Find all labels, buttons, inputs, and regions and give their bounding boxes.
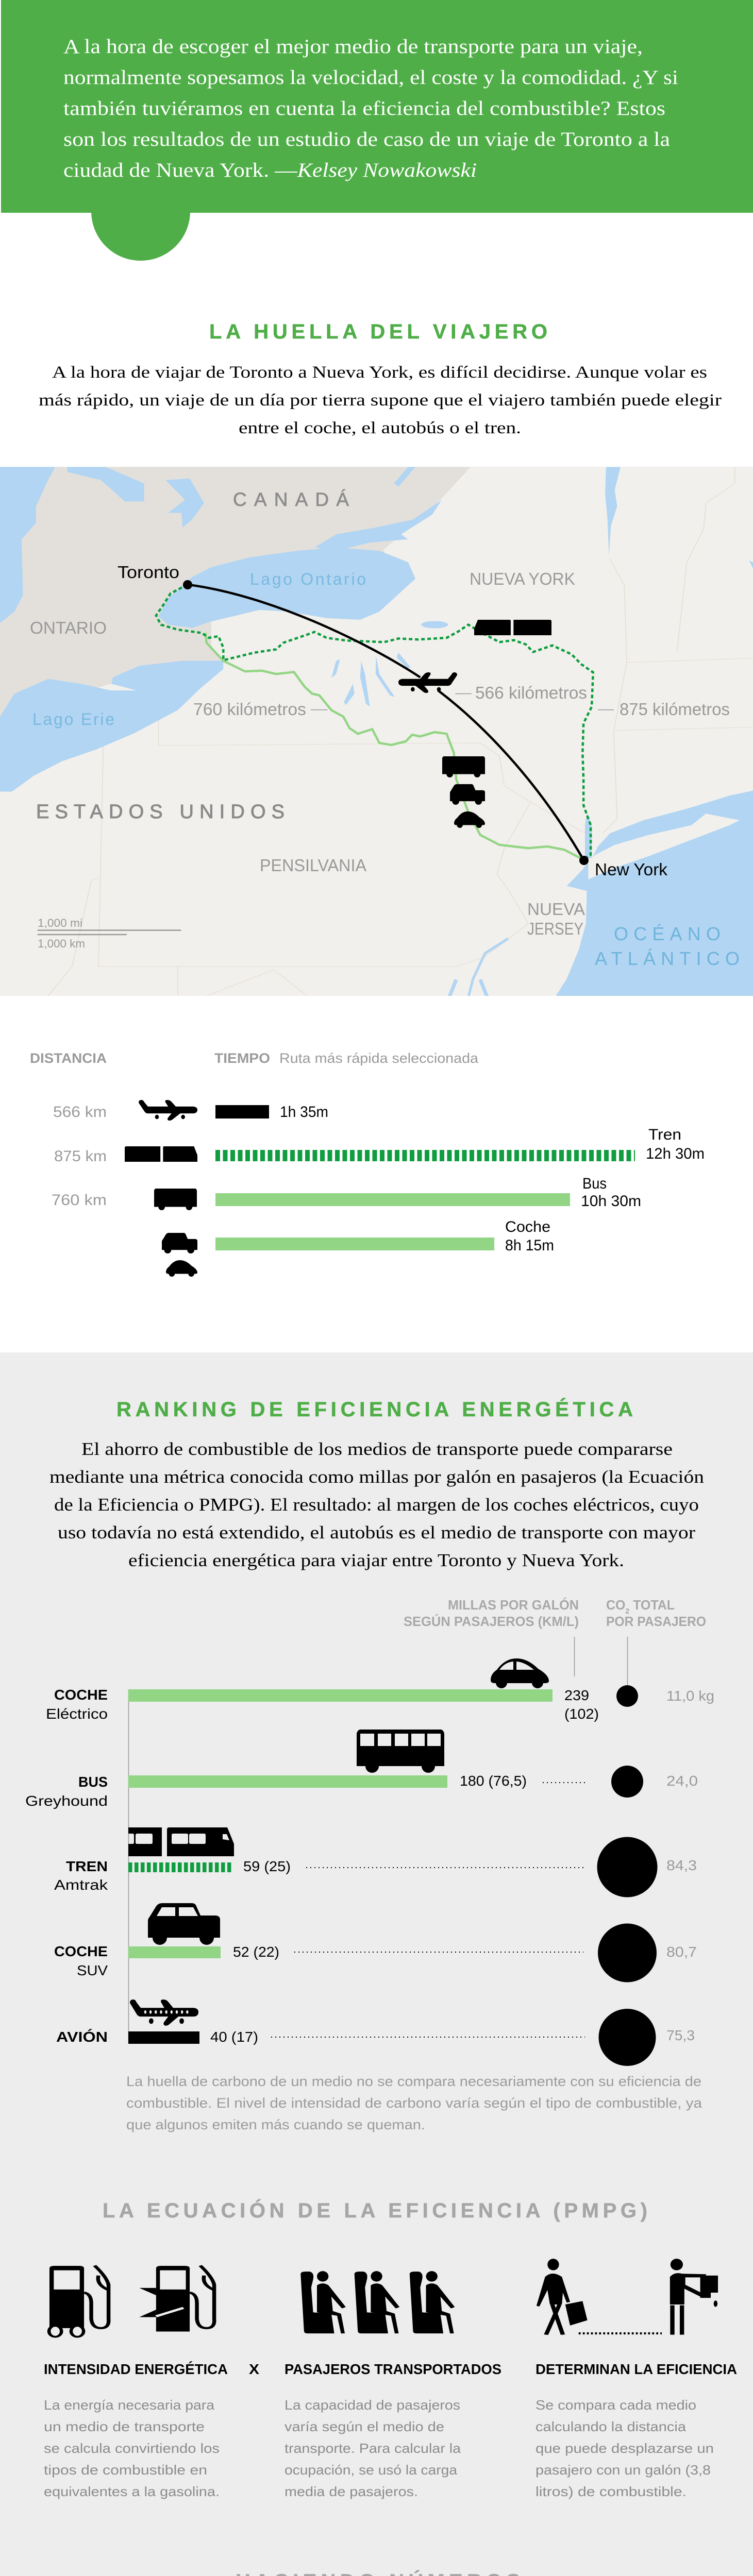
dashes — [311, 693, 614, 710]
column: intensidad energética — [44, 2361, 228, 2499]
row: suv: 52 (22) — [233, 1944, 279, 1960]
row: electric car — [46, 1658, 714, 1722]
intro text: son los resultados de un estudio de caso de un viaje de Toronto a la — [63, 128, 670, 150]
icon: person with fuel — [670, 2259, 718, 2335]
note: carbon footprint: La huella de carbono de un medio no se compara necesariamente con su eficiencia de — [126, 2074, 701, 2089]
row: car: 8h 15m — [505, 1237, 554, 1254]
text: huella intro: entre el coche, el autobús o el tren. — [239, 419, 521, 437]
row: bus: 24,0 — [666, 1773, 698, 1789]
text: ranking intro: eficiencia energética para viajar entre Toronto y Nueva York. — [128, 1551, 624, 1570]
text: ranking intro: de la Eficiencia o PMPG). El resultado: al margen de los coches eléctricos, cuyo — [54, 1495, 699, 1515]
row: electric car: 239 — [564, 1687, 589, 1703]
row: bus: Greyhound — [25, 1793, 108, 1809]
table headers — [30, 1050, 479, 1066]
borders — [48, 467, 753, 996]
chart headers: 2 — [625, 1607, 629, 1616]
icon: bus on map — [442, 756, 485, 777]
row: plane: 1h 35m — [280, 1104, 328, 1121]
text: huella intro — [39, 363, 722, 437]
panel: intro banner — [1, 0, 753, 261]
row: suv — [54, 1903, 697, 1982]
map labels: Lago Ontario — [250, 570, 366, 588]
marker: New York — [579, 856, 589, 865]
map labels: 1,000 km — [38, 937, 85, 950]
row: electric car: Eléctrico — [46, 1706, 108, 1722]
map labels: 566 kilómetros — [475, 683, 587, 702]
row: suv: 80,7 — [666, 1944, 697, 1960]
text: ranking intro — [49, 1439, 704, 1570]
note: carbon footprint: combustible. El nivel de intensidad de carbono varía según el tipo de combustible, ya — [126, 2095, 702, 2111]
row: train: 875 km — [54, 1148, 107, 1165]
intro text: ciudad de Nueva York. — Kelsey Nowakowski — [63, 159, 477, 181]
row: train — [54, 1827, 697, 1897]
text: ranking intro: El ahorro de combustible de los medios de transporte puede compararse — [81, 1439, 673, 1459]
heading: ranking: RANKING DE EFICIENCIA ENERGÉTICA — [116, 1398, 633, 1421]
column: pasajeros transportados: ocupación, se usó la carga — [285, 2462, 458, 2478]
region: Canada — [0, 467, 471, 717]
map labels: 760 kilómetros — [193, 700, 306, 719]
icon: walking traveller — [537, 2259, 588, 2335]
column: pasajeros transportados: media de pasajeros. — [285, 2484, 418, 2499]
row: bus — [52, 1175, 641, 1210]
column: pasajeros transportados — [285, 2361, 501, 2499]
intro text: normalmente sopesamos la velocidad, el coste y la comodidad. ¿Y si — [63, 66, 678, 89]
row: bus: Bus — [582, 1175, 607, 1192]
intro text — [63, 36, 678, 181]
route: bus and car — [206, 633, 583, 860]
row: electric car: (102) — [564, 1706, 599, 1722]
icon: suv on map — [450, 784, 485, 805]
icon: car on map — [454, 811, 485, 828]
column: pasajeros transportados: transporte. Para calcular la — [285, 2441, 461, 2456]
map labels: ATLÁNTICO — [595, 948, 740, 969]
column: pasajeros transportados: La capacidad de pasajeros — [285, 2397, 460, 2413]
row: plane: 75,3 — [666, 2027, 695, 2043]
note: carbon footprint: que algunos emiten más cuando se queman. — [126, 2117, 425, 2132]
icon: fuel pump crossed — [139, 2265, 214, 2332]
row: suv: COCHE — [54, 1943, 108, 1959]
row: plane — [53, 1100, 328, 1121]
text: huella intro: más rápido, un viaje de un día por tierra supone que el viajero también puede elegir — [39, 391, 722, 410]
intro text: también tuviéramos en cuenta la eficiencia del combustible? Estos — [63, 97, 665, 120]
row: train: Tren — [648, 1126, 681, 1143]
route: plane — [188, 585, 584, 860]
row: bus: BUS — [78, 1774, 108, 1790]
row: bus: 180 (76,5) — [460, 1773, 527, 1789]
column: intensidad energética: INTENSIDAD ENERGÉTICA — [44, 2361, 228, 2377]
row: suv: SUV — [77, 1962, 108, 1978]
water: lakes, rivers and ocean — [0, 467, 753, 997]
map labels: Lago Erie — [32, 710, 114, 728]
column: intensidad energética: equivalentes a la gasolina. — [44, 2484, 220, 2499]
row: plane: 566 km — [53, 1104, 107, 1121]
intro text: A la hora de escoger el mejor medio de transporte para un viaje, — [63, 36, 643, 58]
column: intensidad energética: tipos de combustible en — [44, 2462, 207, 2478]
column: determinan la eficiencia: litros) de combustible. — [536, 2484, 687, 2499]
map labels — [30, 489, 740, 969]
panel: distance and time table — [30, 1050, 705, 1277]
column: pasajeros transportados: varía según el medio de — [285, 2419, 444, 2434]
land: Long Island — [588, 814, 740, 879]
map labels: JERSEY — [527, 919, 583, 938]
row: plane: AVIÓN — [56, 2029, 108, 2045]
map labels: NUEVA YORK — [470, 569, 575, 588]
row: train — [54, 1126, 705, 1165]
symbol: multiply: X — [249, 2361, 259, 2377]
chart headers: SEGÚN PASAJEROS (KM/L) — [404, 1614, 579, 1629]
column: determinan la eficiencia: calculando la distancia — [536, 2419, 687, 2434]
table headers: Ruta más rápida seleccionada — [279, 1050, 479, 1066]
map labels: 1,000 mi — [38, 917, 82, 929]
map labels: PENSILVANIA — [260, 856, 366, 875]
row: car: Coche — [505, 1218, 550, 1235]
route: train — [156, 585, 593, 860]
chart headers: POR PASAJERO — [606, 1614, 706, 1629]
panel: grey background — [0, 1352, 753, 2576]
row: plane — [56, 1999, 695, 2066]
column: determinan la eficiencia: DETERMINAN LA EFICIENCIA — [536, 2361, 737, 2377]
column: intensidad energética: un medio de transporte — [44, 2419, 205, 2434]
map: Toronto to New York routes — [0, 467, 753, 997]
row: train: TREN — [66, 1858, 108, 1874]
chart headers — [129, 1597, 706, 2044]
scale bars — [38, 930, 181, 935]
map labels: OCÉANO — [614, 923, 721, 944]
row: plane: 40 (17) — [210, 2029, 258, 2045]
icons: equation — [49, 2259, 718, 2337]
map labels: ESTADOS UNIDOS — [36, 801, 285, 823]
map labels: NUEVA — [527, 900, 585, 919]
icon: seated passengers — [300, 2271, 455, 2333]
text: ranking intro: mediante una métrica conocida como millas por galón en pasajeros (la Ecuación — [49, 1467, 704, 1487]
map labels: Toronto — [118, 563, 179, 582]
heading: la ecuación: LA ECUACIÓN DE LA EFICIENCIA (PMPG) — [103, 2198, 647, 2222]
map labels: New York — [595, 860, 667, 879]
text: huella intro: A la hora de viajar de Toronto a Nueva York, es difícil decidirse. Aunque volar es — [52, 363, 707, 382]
row: bus — [25, 1730, 698, 1809]
icon: fuel pump with wheels — [49, 2265, 109, 2337]
row: bus: 760 km — [52, 1192, 107, 1209]
row: train: 12h 30m — [646, 1145, 705, 1162]
row: electric car: 11,0 kg — [666, 1688, 714, 1704]
chart headers: MILLAS POR GALÓN — [448, 1597, 579, 1613]
icon: plane on map — [398, 672, 457, 693]
text: ranking intro: uso todavía no está extendido, el autobús es el medio de transporte con mayor — [58, 1523, 696, 1543]
chart headers: CO — [606, 1597, 626, 1613]
column: intensidad energética: se calcula convirtiendo los — [44, 2441, 220, 2456]
heading: la huella del viajero: LA HUELLA DEL VIAJERO — [209, 320, 547, 343]
row: bus: 10h 30m — [581, 1193, 641, 1210]
column: pasajeros transportados: PASAJEROS TRANSPORTADOS — [285, 2361, 501, 2377]
icon: dotted distance — [579, 2331, 662, 2335]
icon: train on map — [474, 620, 551, 635]
table headers: TIEMPO — [214, 1050, 270, 1066]
row: car — [162, 1218, 554, 1277]
column: intensidad energética: La energía necesaria para — [44, 2397, 215, 2413]
column: determinan la eficiencia: pasajero con un galón (3,8 — [536, 2462, 711, 2478]
map labels: CANADÁ — [233, 489, 349, 510]
map labels: 875 kilómetros — [620, 700, 730, 719]
chart: efficiency ranking — [25, 1597, 714, 2066]
column: determinan la eficiencia — [536, 2361, 737, 2499]
note: carbon footprint — [126, 2074, 702, 2132]
chart headers: TOTAL — [629, 1597, 675, 1613]
marker: Toronto — [183, 580, 192, 589]
map labels: ONTARIO — [30, 618, 107, 637]
row: train: Amtrak — [54, 1877, 108, 1893]
row: train: 59 (25) — [243, 1858, 291, 1874]
table headers: DISTANCIA — [30, 1050, 107, 1066]
row: electric car: COCHE — [54, 1687, 108, 1703]
column: determinan la eficiencia: que puede desplazarse un — [536, 2441, 714, 2456]
row: train: 84,3 — [666, 1857, 697, 1873]
column: determinan la eficiencia: Se compara cada medio — [536, 2397, 696, 2413]
